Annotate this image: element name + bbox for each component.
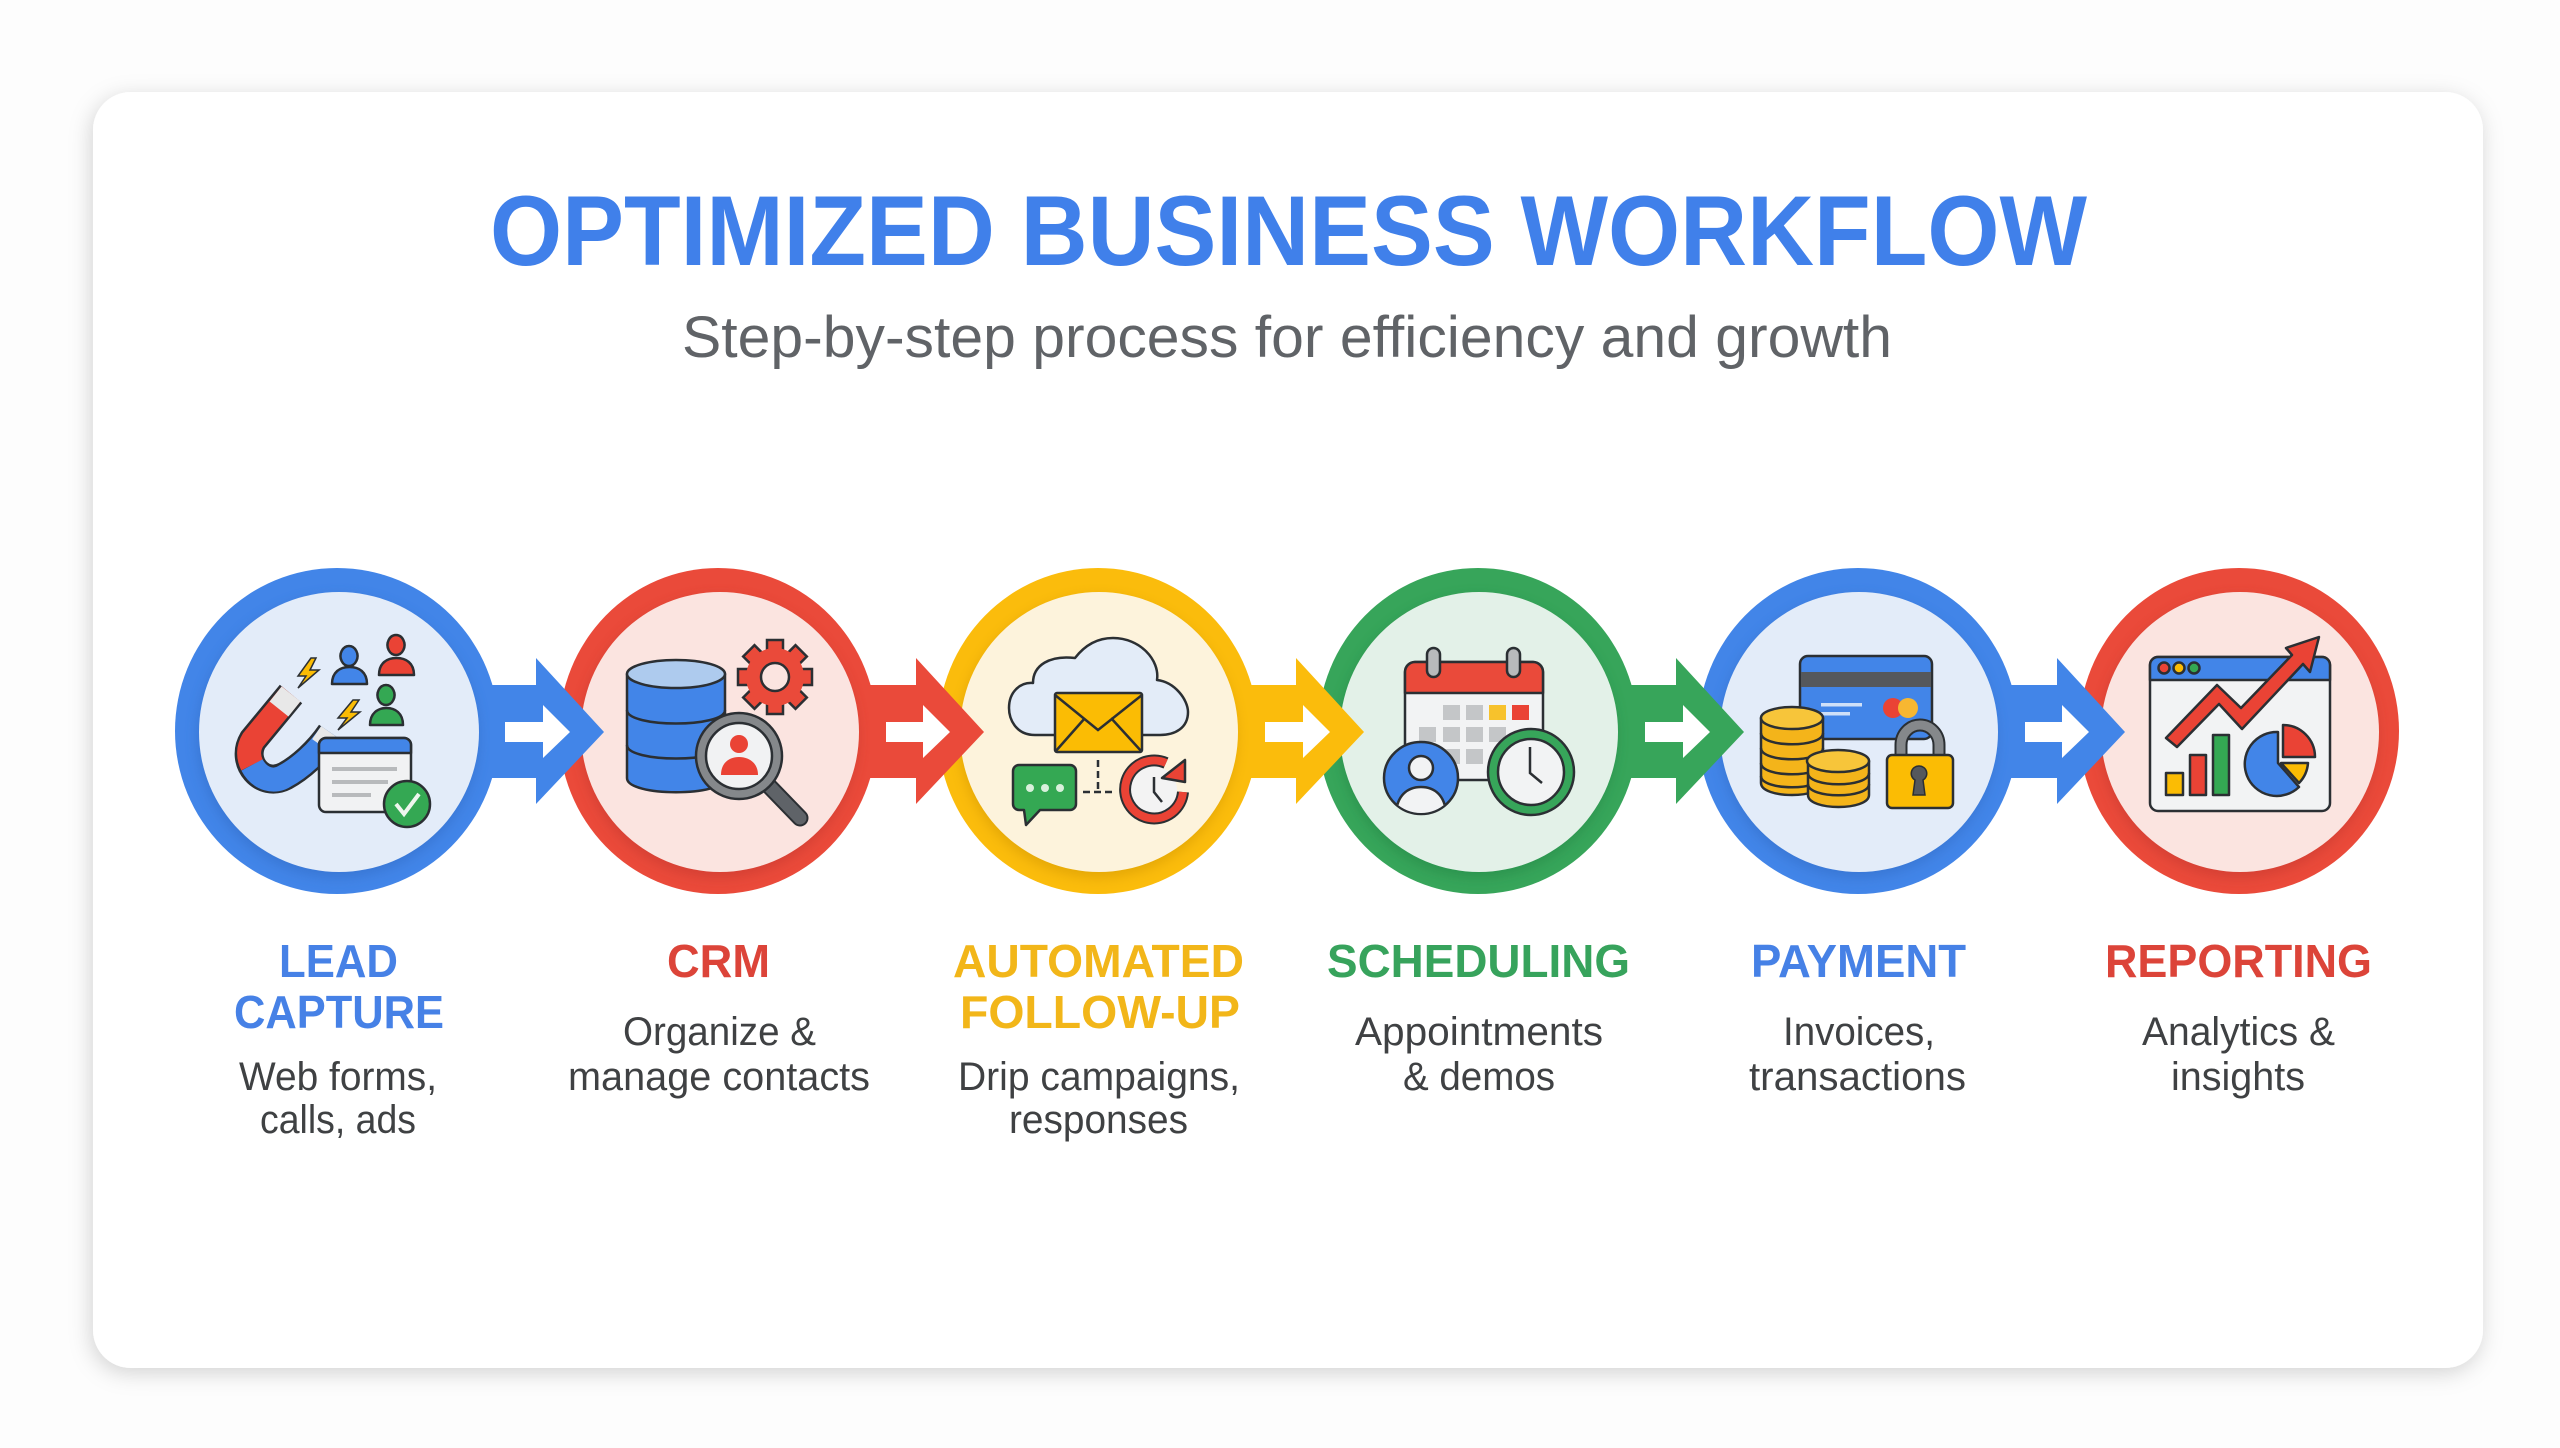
circle badge: reporting: [2079, 568, 2399, 894]
label: lead capture heading: CAPTURE: [234, 986, 444, 1038]
label: CRM heading: CRM: [667, 935, 770, 987]
label: scheduling heading: SCHEDULING: [1327, 935, 1630, 987]
step 3: automated follow-up: [938, 568, 1258, 1142]
text: payment description: [1749, 1010, 1966, 1099]
circle badge: automated follow-up: [938, 568, 1258, 894]
label: reporting heading: REPORTING: [2105, 935, 2372, 987]
arrow: lead capture to CRM: [490, 658, 604, 804]
text: automated follow-up description: [958, 1055, 1240, 1142]
label: automated follow-up heading: FOLLOW-UP: [960, 986, 1240, 1038]
text: scheduling description: & demos: [1403, 1055, 1555, 1099]
text: lead capture description: [239, 1055, 437, 1142]
text: payment description: transactions: [1749, 1055, 1966, 1099]
icon: calendar with user and clock: [1384, 648, 1574, 816]
label: lead capture heading: LEAD: [279, 935, 398, 987]
text: lead capture description: calls, ads: [260, 1098, 416, 1142]
text: reporting description: insights: [2171, 1055, 2305, 1099]
text: scheduling description: Appointments: [1355, 1010, 1603, 1054]
icon: magnet attracting leads into form: [249, 635, 430, 827]
text: automated follow-up description: responses: [1009, 1098, 1188, 1142]
text: lead capture description: Web forms,: [239, 1055, 437, 1099]
step 2: CRM: [559, 568, 877, 1099]
icon: analytics dashboard with trend arrow: [2150, 637, 2330, 811]
arrow: scheduling to payment: [1630, 658, 1744, 804]
icon: credit card, coins and padlock: [1761, 656, 1953, 808]
text: payment description: Invoices,: [1783, 1010, 1935, 1054]
arrow: payment to reporting: [2010, 658, 2125, 804]
step 4: scheduling: [1318, 568, 1638, 1099]
circle badge: scheduling: [1318, 568, 1638, 894]
label: payment heading: PAYMENT: [1751, 935, 1966, 987]
icon: cloud email, chat and refresh clock: [1009, 638, 1188, 825]
text: CRM description: Organize &: [623, 1010, 816, 1054]
step 1: lead capture: [175, 568, 499, 1142]
arrow: CRM to automated follow-up: [870, 658, 984, 804]
text: scheduling description: [1355, 1010, 1603, 1099]
circle badge: lead capture: [175, 568, 499, 894]
text: automated follow-up description: Drip campaigns,: [958, 1055, 1240, 1099]
text: CRM description: [568, 1010, 870, 1099]
step 5: payment: [1698, 568, 2018, 1099]
title: OPTIMIZED BUSINESS WORKFLOW: [490, 175, 2088, 286]
label: lead capture heading: [234, 935, 444, 1038]
label: automated follow-up heading: [953, 935, 1244, 1038]
icon: database with gear and magnifier: [627, 640, 812, 818]
arrow: automated follow-up to scheduling: [1250, 658, 1364, 804]
text: reporting description: Analytics &: [2142, 1010, 2335, 1054]
step 6: reporting: [2079, 568, 2399, 1099]
label: automated follow-up heading: AUTOMATED: [953, 935, 1244, 987]
subtitle: Step-by-step process for efficiency and growth: [682, 305, 1892, 370]
text: CRM description: manage contacts: [568, 1055, 870, 1099]
circle badge: payment: [1698, 568, 2018, 894]
circle badge: CRM: [559, 568, 877, 894]
text: reporting description: [2142, 1010, 2335, 1099]
